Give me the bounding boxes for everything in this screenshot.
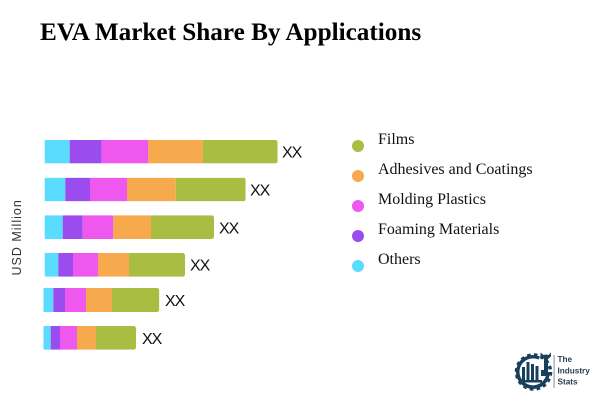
logo text bbox=[558, 355, 590, 386]
bar value labels: XX bbox=[219, 220, 240, 238]
title: EVA Market Share By Applications bbox=[40, 19, 421, 46]
legend item: Adhesives and Coatings: Adhesives and Coatings bbox=[378, 161, 533, 178]
legend item: Foaming Materials bbox=[352, 221, 499, 242]
legend item: Molding Plastics bbox=[352, 191, 486, 212]
bar value labels: XX bbox=[282, 144, 303, 162]
legend item: Films: Films bbox=[378, 131, 414, 148]
bar 4 bbox=[45, 253, 185, 277]
logo text: Industry bbox=[558, 366, 590, 376]
legend item: Films bbox=[352, 131, 414, 152]
y axis label: USD Million bbox=[10, 199, 24, 276]
bar 2 bbox=[45, 178, 246, 201]
bar chart bbox=[44, 140, 278, 350]
bar value labels: XX bbox=[250, 182, 271, 200]
legend item: Molding Plastics: Molding Plastics bbox=[378, 191, 486, 208]
bar value labels: XX bbox=[190, 258, 211, 274]
legend item: Others bbox=[352, 251, 421, 272]
legend item: Adhesives and Coatings bbox=[352, 161, 533, 182]
bar 3 bbox=[45, 215, 214, 239]
bar value labels: XX bbox=[142, 331, 163, 348]
bar 6 bbox=[44, 326, 136, 350]
logo bbox=[516, 352, 590, 389]
legend item: Others: Others bbox=[378, 251, 421, 268]
bar value labels bbox=[142, 144, 303, 348]
bar 5 bbox=[44, 288, 159, 312]
icon: gear with wrench and factory bbox=[516, 352, 551, 389]
bar value labels: XX bbox=[165, 293, 186, 310]
logo text: The bbox=[558, 355, 573, 364]
legend bbox=[352, 131, 533, 272]
legend item: Foaming Materials: Foaming Materials bbox=[378, 221, 499, 238]
bar 1 bbox=[45, 140, 278, 163]
logo divider bbox=[554, 355, 555, 388]
logo text: Stats bbox=[558, 378, 578, 386]
